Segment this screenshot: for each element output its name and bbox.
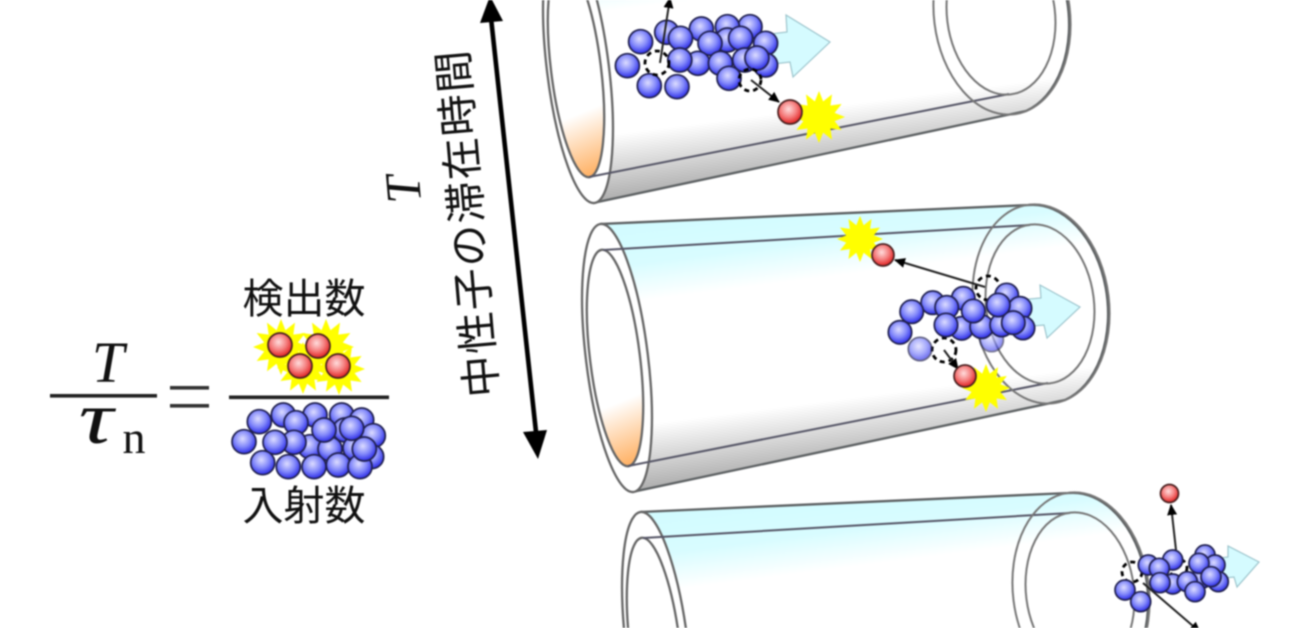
label: detected count: 検出数 [242, 276, 366, 322]
fraction bar [229, 396, 389, 399]
decay sites and proton paths [1122, 505, 1200, 628]
detected protons with flashes [253, 319, 365, 395]
guide tube [531, 0, 1082, 207]
decay proton [778, 100, 802, 124]
neutron beam direction arrow [762, 15, 830, 77]
fraction: T over tau n [50, 330, 157, 463]
panel: tube at second moment [570, 196, 1121, 496]
decay protons [872, 244, 976, 387]
decay sites and proton paths [895, 260, 1000, 369]
flashes [837, 216, 1010, 412]
guide tube [610, 484, 1161, 628]
axis label: neutron residence time: 中性子の滞在時間 [429, 49, 507, 399]
guide tube [570, 196, 1121, 496]
fraction: T over tau n: T [92, 330, 128, 395]
fraction: T over tau n: n [122, 412, 146, 463]
decay proton [1160, 484, 1178, 502]
label: incident count: 入射数 [242, 483, 366, 529]
panel: tube at first moment [531, 0, 1082, 207]
flash [793, 91, 845, 143]
panel: tube at third moment [610, 484, 1259, 628]
neutron cluster [888, 283, 1035, 361]
incident neutrons cluster [232, 403, 385, 479]
decay sites and proton paths [645, 0, 779, 102]
neutron beam direction arrow [1212, 546, 1259, 587]
neutron cluster [1115, 545, 1228, 612]
neutron beam direction arrow [1018, 285, 1080, 338]
equals sign [170, 386, 209, 408]
equation [50, 276, 389, 529]
neutron cluster [615, 15, 778, 99]
fraction: T over tau n: τ [79, 377, 117, 459]
double-headed arrow: time span [480, 0, 547, 459]
axis label: T: T [374, 170, 432, 206]
